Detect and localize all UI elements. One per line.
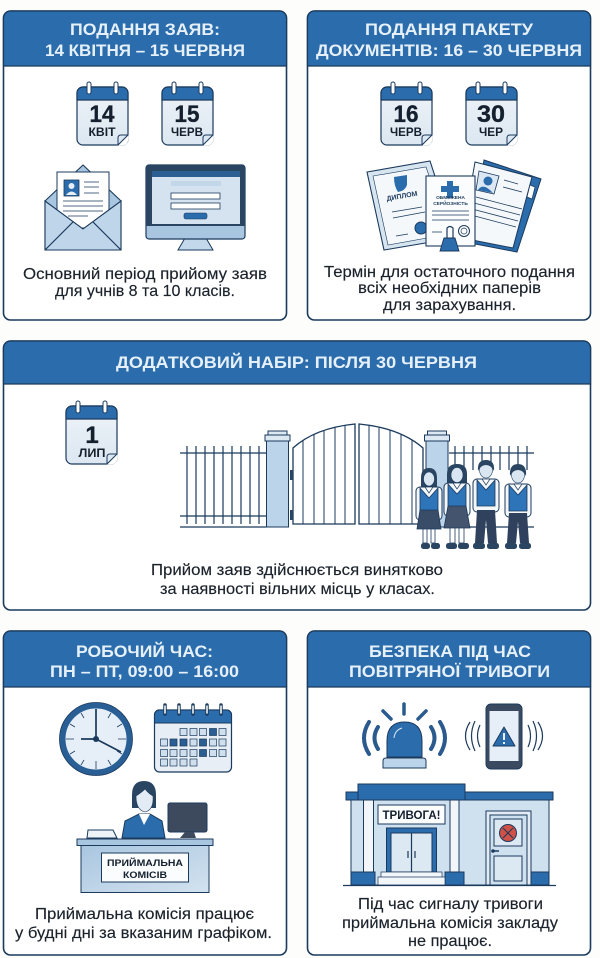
text: working hours description [15, 906, 272, 942]
text: air raid safety description [342, 896, 558, 950]
icon: envelope with application letter [45, 165, 121, 250]
heading: working hours [50, 642, 239, 681]
illustration: admissions desk with receptionist: КОМІСІВ [123, 870, 167, 881]
text: application period description: Основний період прийому заяв [23, 266, 267, 283]
icon: stack of documents [367, 160, 541, 252]
panel header: additional enrollment [4, 341, 590, 384]
heading: application period [45, 21, 245, 60]
panel header: application period [4, 11, 286, 66]
text: document submission description: Термін для остаточного подання [324, 264, 575, 281]
text: air raid safety description: Під час сигналу тривоги [358, 896, 543, 913]
heading: working hours: ПН – ПТ, 09:00 – 16:00 [50, 663, 239, 681]
text: application period description [23, 266, 267, 300]
heading: document submission: ПОДАННЯ ПАКЕТУ [365, 21, 534, 39]
icon: calendar 30 June: ЧЕР [479, 127, 503, 139]
panel header: document submission [308, 11, 590, 66]
text: air raid safety description: не працює. [408, 933, 492, 950]
text: document submission description: для зарахування. [383, 297, 516, 314]
illustration: school building [343, 784, 556, 886]
icon: phone with warning [466, 704, 542, 769]
panel: working hours [4, 631, 286, 955]
icon: calendar 1 July: 1 [85, 422, 99, 449]
illustration: admissions desk with receptionist [77, 781, 213, 892]
text: additional enrollment description: Прийом заяв здійснюється винятково [151, 562, 443, 579]
panel: document submission [308, 11, 590, 320]
illustration: school fence and gate [180, 424, 534, 527]
icon: monthly calendar [154, 705, 232, 772]
icon: alarm siren [364, 704, 445, 768]
text: additional enrollment description [151, 562, 443, 598]
icon: calendar 16 June: ЧЕРВ [390, 127, 422, 139]
heading: air raid safety: БЕЗПЕКА ПІД ЧАС [369, 643, 531, 661]
door with closed sign [486, 811, 531, 885]
student 1 [416, 468, 442, 549]
panel: air raid safety [308, 631, 590, 955]
text: document submission description [324, 264, 575, 314]
heading: additional enrollment: ДОДАТКОВИЙ НАБІР: ПІСЛЯ 30 ЧЕРВНЯ [116, 353, 477, 372]
icon: wall clock [60, 702, 132, 776]
panel: additional enrollment [4, 341, 590, 610]
icon: calendar 16 June [381, 82, 432, 145]
icon: calendar 30 June [466, 82, 517, 145]
icon: calendar 15 June: 15 [174, 101, 200, 128]
heading: document submission: ДОКУМЕНТІВ: 16 – 30 ЧЕРВНЯ [316, 42, 582, 60]
icon: calendar 14 April: КВІТ [88, 127, 116, 139]
heading: application period: 14 КВІТНЯ – 15 ЧЕРВНЯ [45, 42, 245, 60]
icon: calendar 1 July: ЛИП [78, 448, 106, 460]
text: document submission description: всіх необхідних паперів [358, 280, 541, 297]
heading: air raid safety: ПОВІТРЯНОЇ ТРИВОГИ [349, 663, 550, 681]
icon: calendar 15 June [162, 82, 213, 145]
icon: stack of documents: ОБМЕЖЕНА [436, 195, 465, 201]
text: additional enrollment description: за наявності вільних місць у класах. [160, 581, 435, 598]
sign: alarm [378, 805, 445, 824]
icon: calendar 16 June: 16 [394, 101, 418, 128]
icon: stack of documents: ДИПЛОМ [386, 191, 418, 203]
icon: calendar 14 April [77, 82, 128, 145]
panel header: air raid safety [308, 631, 590, 687]
icon: calendar 14 April: 14 [90, 101, 115, 128]
illustration: admissions desk with receptionist: ПРИЙМАЛЬНА [107, 857, 183, 869]
text: application period description: для учнів 8 та 10 класів. [55, 283, 235, 300]
heading: application period: ПОДАННЯ ЗАЯВ: [70, 21, 220, 39]
student 3 [473, 460, 499, 549]
text: working hours description: Приймальна комісія працює [35, 906, 254, 923]
panel header: working hours [4, 631, 286, 687]
heading: document submission [316, 21, 582, 60]
heading: air raid safety [349, 643, 550, 681]
heading: working hours: РОБОЧИЙ ЧАС: [76, 642, 213, 661]
icon: calendar 30 June: 30 [477, 101, 505, 128]
panel: application period [4, 11, 286, 320]
text: working hours description: у будні дні за вказаним графіком. [15, 925, 272, 942]
icon: calendar 15 June: ЧЕРВ [171, 127, 203, 139]
icon: calendar 1 July [66, 401, 117, 464]
icon: stack of documents: СЕРЙОЗНІСТЬ [433, 199, 468, 207]
text: air raid safety description: приймальна комісія закладу [342, 915, 558, 932]
student 2 [444, 464, 470, 549]
sign: alarm: ТРИВОГА! [382, 810, 440, 822]
icon: computer with online form [146, 165, 245, 250]
illustration: four students [416, 460, 531, 549]
student 4 [505, 464, 531, 549]
